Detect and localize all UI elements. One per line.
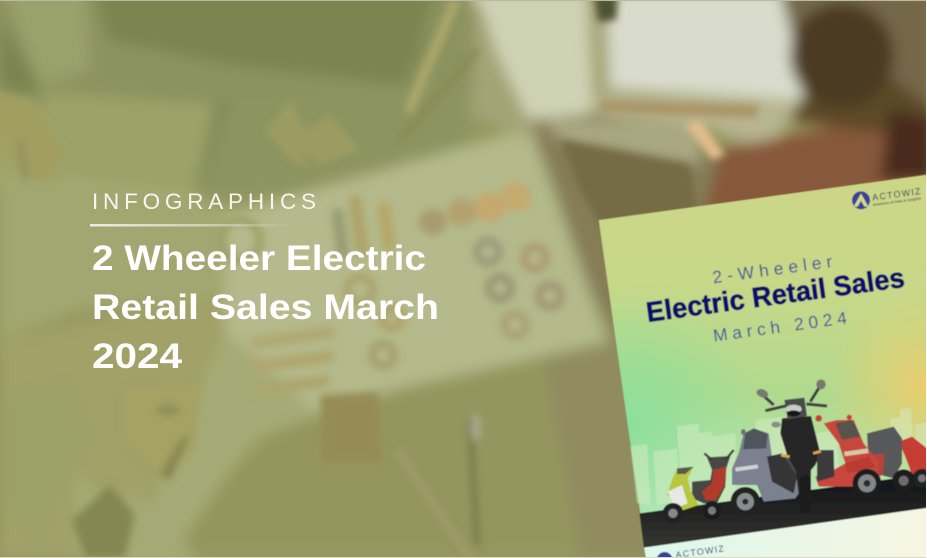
cover logo: Solutions of Data & Insights xyxy=(873,196,921,207)
cover title: March 2024 xyxy=(712,307,848,346)
city skyline xyxy=(630,408,927,503)
cover logo xyxy=(852,186,922,209)
dark grey scooter xyxy=(867,427,915,492)
cover background xyxy=(599,175,927,558)
lower panel xyxy=(644,508,927,558)
title: 2 Wheeler Electric xyxy=(92,239,426,278)
yellow-green scooter xyxy=(663,467,699,524)
title xyxy=(92,239,439,376)
cover title: Electric Retail Sales xyxy=(644,262,906,328)
cover logo: ACTOWIZ xyxy=(872,186,922,203)
small red scooter xyxy=(692,450,734,520)
cover title xyxy=(644,251,906,346)
title: 2024 xyxy=(92,337,183,376)
far-right red scooter xyxy=(899,437,927,488)
black centre scooter xyxy=(755,379,834,513)
eyebrow label: INFOGRAPHICS xyxy=(92,189,316,214)
road xyxy=(640,474,927,548)
grey scooter xyxy=(731,422,802,516)
heading block xyxy=(90,189,439,376)
title: Retail Sales March xyxy=(92,288,439,327)
cover title: 2-Wheeler xyxy=(711,251,834,287)
red scooter xyxy=(815,415,881,498)
gradient rule xyxy=(90,224,295,226)
tilted report cover xyxy=(599,175,927,558)
